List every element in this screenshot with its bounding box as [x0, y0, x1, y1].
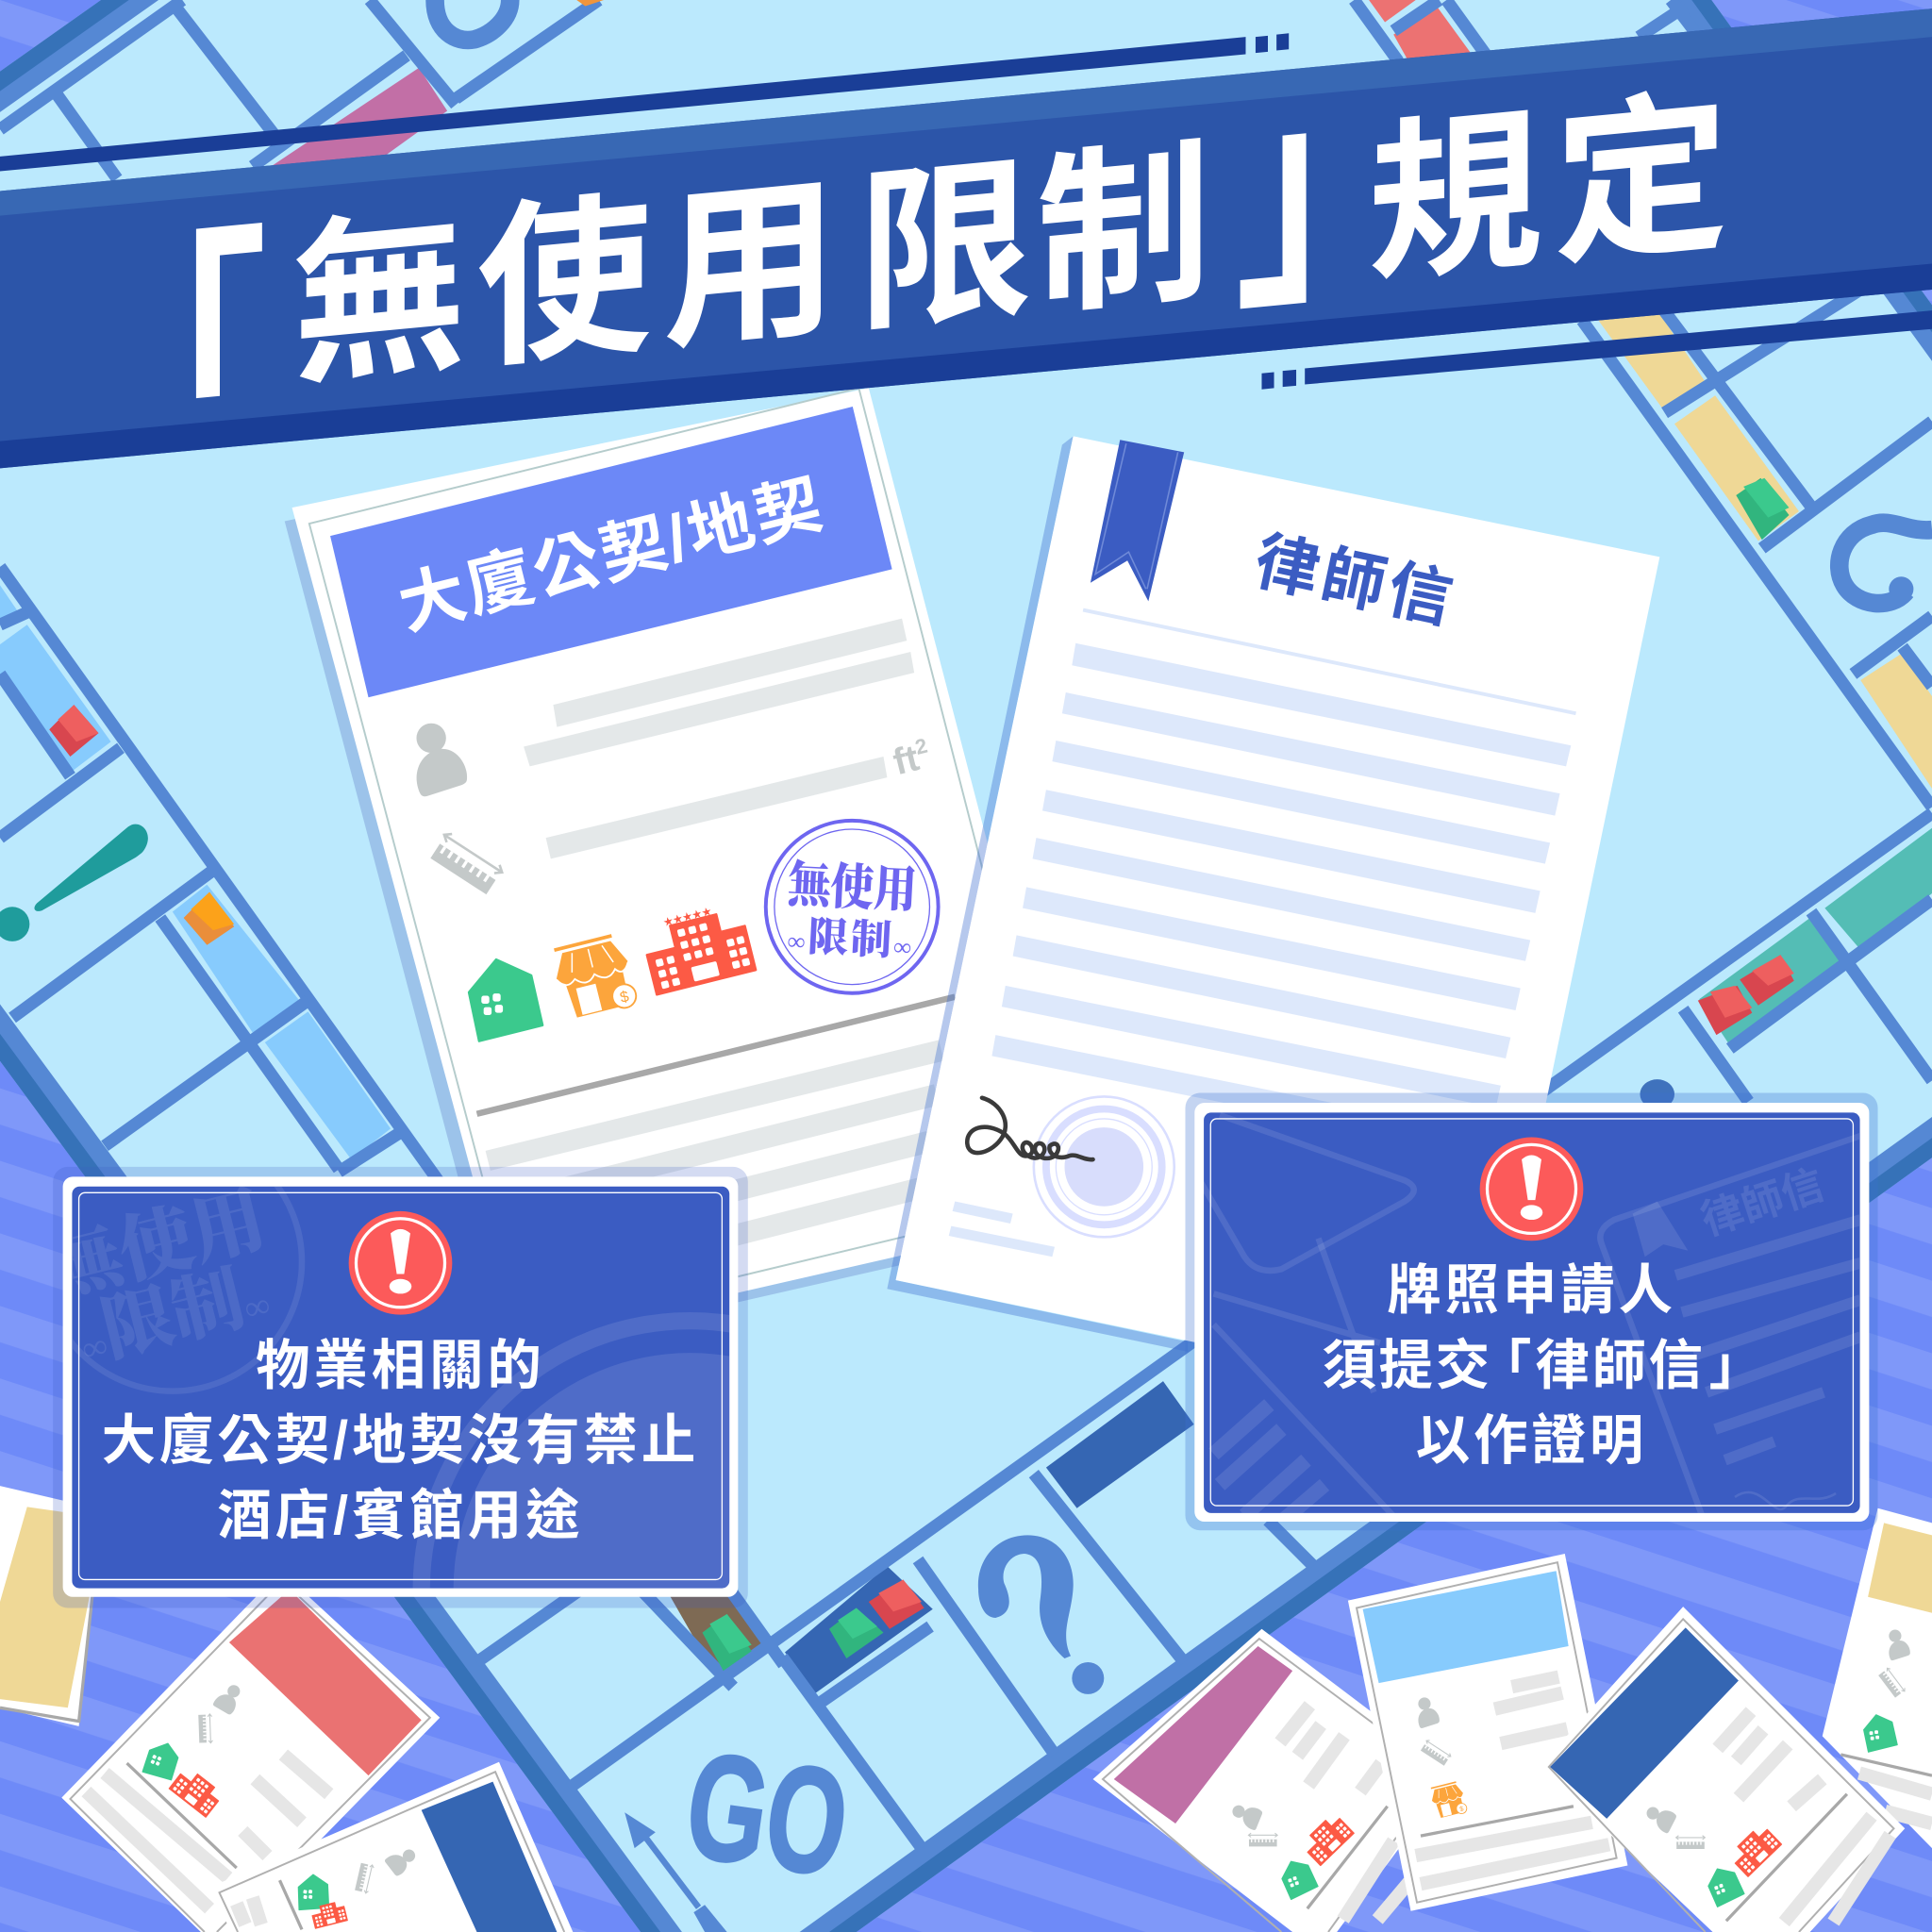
seal — [1034, 1096, 1174, 1237]
scattered document: red header — [61, 1571, 440, 1932]
stamp: no use restriction: 無使用 — [786, 857, 918, 919]
callout text: 大廈公契/地契沒有禁止 — [102, 1410, 699, 1471]
ribbon bookmark — [1091, 440, 1184, 601]
panel: building deed document — [285, 388, 1084, 1356]
stamp: no use restriction — [766, 821, 939, 993]
arrow on GO corner — [625, 1812, 727, 1932]
stamp: no use restriction: ∞限制∞ — [787, 913, 915, 965]
icon: game houses — [49, 478, 1794, 1671]
title banner — [0, 0, 1932, 524]
watermark stamp and seal: 無使用 — [39, 1178, 275, 1311]
callout: deed requirement — [53, 1166, 748, 1607]
watermark envelope and letter: 律師信 — [1696, 1161, 1829, 1244]
icon: ruler — [429, 831, 505, 895]
panel: lawyer letter document — [887, 436, 1659, 1402]
ft squared label: ft — [890, 738, 923, 783]
callout text — [102, 1336, 699, 1546]
callout text — [1322, 1260, 1763, 1471]
callout text: 以作證明 — [1416, 1410, 1647, 1471]
paper and shadow — [285, 388, 1084, 1356]
icon: alert — [349, 1211, 452, 1315]
signature — [967, 1098, 1093, 1159]
scattered document: light blue header — [1348, 1554, 1627, 1911]
title text: 無使用限制 — [292, 125, 1211, 407]
callout text: 牌照申請人 — [1387, 1260, 1676, 1321]
scattered document: dark blue header — [212, 1762, 573, 1932]
deed text lines — [486, 619, 943, 1275]
scattered document: yellow left — [0, 1486, 105, 1726]
letter lines — [949, 610, 1576, 1257]
callout text: 須提交「律師信」 — [1322, 1336, 1763, 1396]
title text: 「 — [69, 208, 268, 524]
ft squared label: 2 — [913, 734, 930, 759]
GO text on corner: GO — [677, 1720, 858, 1908]
title text — [69, 0, 1728, 524]
icon: shop — [550, 934, 639, 1023]
letter title: 律師信 — [1249, 525, 1462, 638]
paper and shadow — [887, 436, 1659, 1402]
watermark stamp and seal — [73, 1187, 729, 1589]
scattered document: purple header — [1093, 1629, 1454, 1932]
deed header bar — [330, 407, 892, 697]
callout text: 酒店/賓館用途 — [217, 1486, 584, 1546]
icon: alert — [1480, 1138, 1583, 1241]
icon: house — [469, 959, 542, 1041]
icon: hotel — [641, 908, 756, 994]
bottom accent line — [1261, 310, 1932, 390]
icon: person — [416, 724, 467, 796]
title text: 規定 — [1368, 76, 1728, 305]
watermark stamp and seal: ∞限制∞ — [70, 1254, 275, 1377]
scattered document: blue header — [1539, 1607, 1905, 1932]
top accent line — [0, 33, 1289, 172]
icon: stars: ★★★★★ — [661, 904, 713, 929]
title text: 」 — [1235, 26, 1433, 341]
callout: lawyer letter requirement — [1185, 1093, 1885, 1530]
callout text: 物業相關的 — [256, 1336, 545, 1396]
scattered document: yellow right — [1823, 1508, 1932, 1848]
deed divider — [476, 997, 955, 1114]
deed header bar: 大廈公契/地契 — [391, 466, 831, 643]
watermark envelope and letter — [1201, 1115, 1885, 1528]
